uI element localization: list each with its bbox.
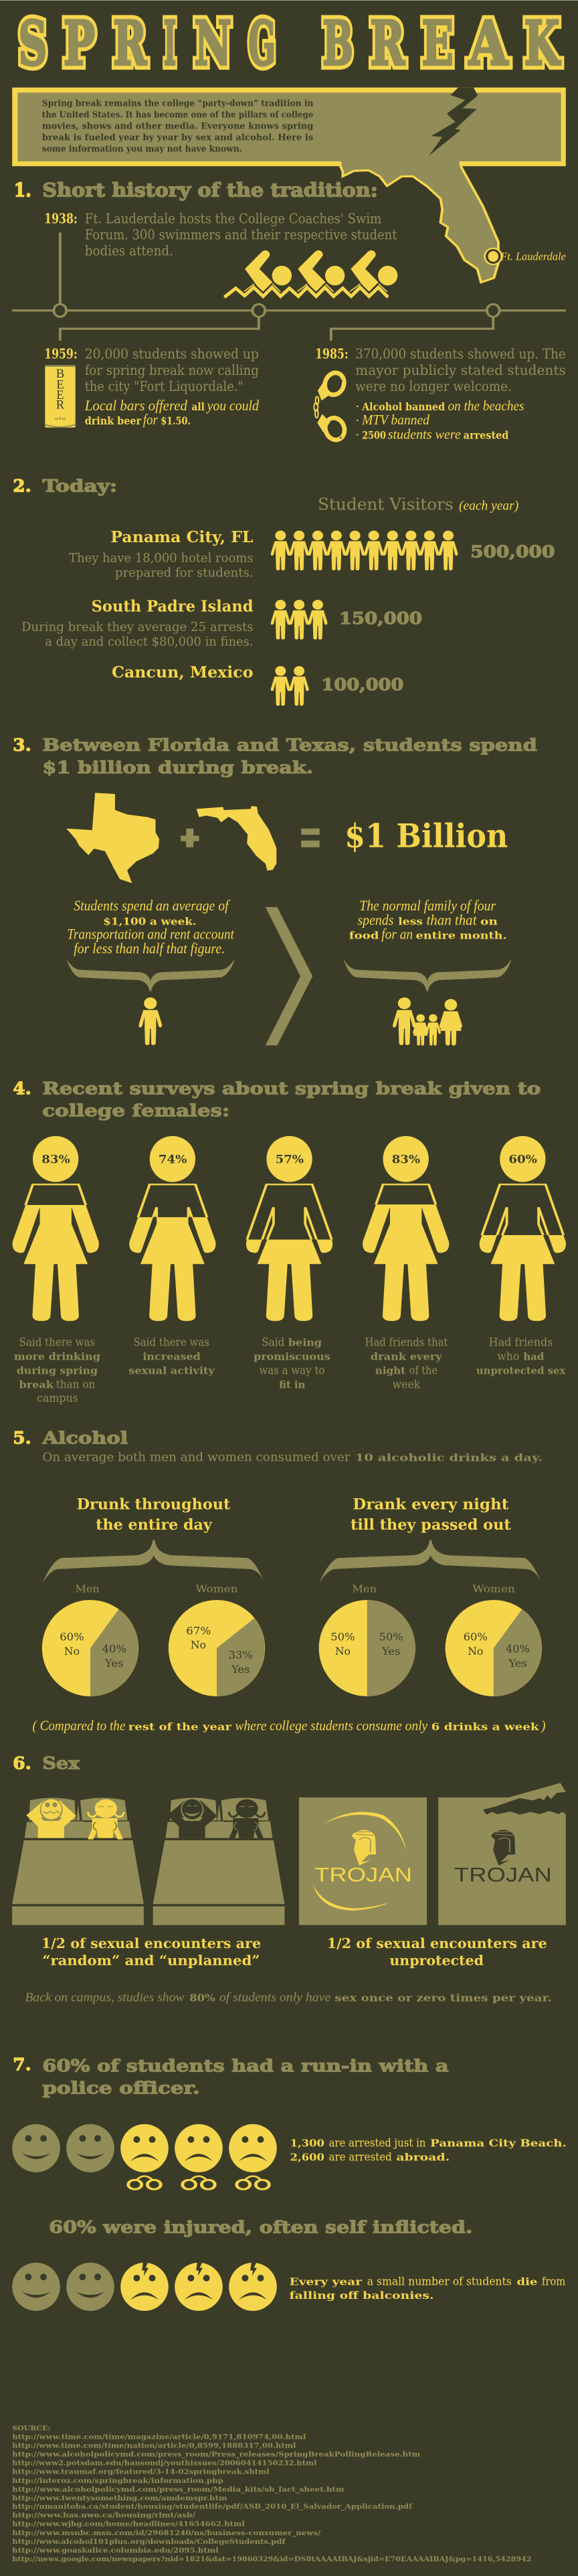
heading 6: [13, 1754, 80, 1773]
caption 5: [476, 1336, 566, 1376]
pictogram: three people: [271, 600, 327, 639]
group heading: drank every night: [351, 1496, 511, 1534]
note: comparison: ( Compared to the: [32, 1718, 125, 1733]
section 3: spending: [13, 736, 537, 1046]
text: student spending: Transportation and rent account: [67, 925, 235, 942]
pie: men drunk all day: [42, 1583, 138, 1696]
list: 1985 bans: arrested: [464, 429, 509, 442]
section: sources: http://www.msnbc.msn.com/id/29681240/ns/business-consumer_news/: [12, 2529, 320, 2537]
section: sources: http://www.alcohol101plus.org/downloads/CollegeStudents.pdf: [12, 2538, 286, 2546]
text: arrests: [290, 2137, 567, 2164]
caption 1: Said there was: [19, 1336, 95, 1349]
text: arrests: are arrested just in: [328, 2137, 426, 2150]
text: family spending: entire month.: [416, 929, 507, 941]
list: 1985 bans: ·: [355, 428, 359, 442]
caption 1: during spring: [17, 1364, 98, 1376]
row: Cancun: Cancun, Mexico: [112, 663, 254, 681]
caption 3: being: [288, 1336, 322, 1348]
caption 1: campus: [37, 1392, 78, 1404]
text: 1985: were no longer welcome.: [355, 379, 512, 394]
text: 1959: drink beer: [85, 415, 141, 427]
pie: women drunk all day: [169, 1583, 265, 1696]
section: sources: http://www2.potsdam.edu/hansondj/youthissues/20060414150232.html: [12, 2460, 316, 2468]
section: sources: http://www.traumaf.org/featured/3-14-02springbreak.shtml: [12, 2468, 270, 2476]
brace right: [319, 1540, 541, 1583]
title: [19, 8, 561, 80]
bed 2: pillows and dark figures: [165, 1797, 272, 1840]
bed 2 blanket: [153, 1840, 284, 1925]
section: sources: http://www.time.com/time/magazine/article/0,9171,810974,00.html: [12, 2433, 306, 2441]
figure: 83% more drinking: [13, 1136, 99, 1321]
text: arrests: are arrested: [328, 2151, 392, 2164]
faces: injuries: [12, 2263, 277, 2311]
note: back on campus: of students only have: [219, 1990, 330, 2004]
title: P: [64, 8, 95, 80]
title: N: [194, 8, 231, 80]
heading 2: [13, 477, 117, 496]
note: comparison: where college students consume only: [235, 1718, 427, 1733]
caption 4: week: [393, 1378, 420, 1391]
text: arrests: 1,300: [290, 2137, 324, 2149]
section: sources: http://www.twentysomething.com/amdemspr.htm: [12, 2494, 227, 2502]
figure: 83% more drinking: 83%: [41, 1153, 70, 1166]
icon: family of four: [393, 997, 462, 1046]
text: intro paragraph: break is fueled year by year by sex and alcohol. Here is: [42, 132, 313, 143]
list: 1985 bans: ·: [355, 400, 359, 413]
section: sources: SOURCE:: [12, 2425, 50, 2433]
text: arrests: 2,600: [290, 2151, 324, 2163]
heading 3: $1 billion during break.: [42, 758, 313, 778]
text: intro paragraph: the United States. It has become one of the pillars of college: [42, 109, 313, 120]
pictogram: two people: [271, 666, 309, 706]
text: student spending: [67, 896, 235, 957]
heading 5: 5.: [13, 1429, 31, 1448]
caption 4: Had friends that: [365, 1336, 448, 1349]
pie: women every night: 40%: [506, 1643, 530, 1656]
pie: women drunk all day: No: [191, 1639, 206, 1652]
pie: women every night: [446, 1583, 542, 1696]
icon: equals: [301, 829, 320, 848]
title: B: [322, 8, 353, 80]
marker: Ft. Lauderdale: [485, 248, 566, 264]
text: 1938: Ft. Lauderdale hosts the College Coaches' Swim: [85, 212, 381, 227]
brace right: [343, 959, 512, 991]
text: student spending: $1,100 a week.: [103, 915, 197, 927]
text: family spending: [349, 896, 507, 942]
pie: men drunk all day: No: [64, 1645, 80, 1658]
pie: men drunk all day: 60%: [60, 1631, 84, 1643]
heading 6: 6.: [13, 1754, 31, 1773]
pie: women every night: Women: [472, 1583, 515, 1595]
caption 4: drank every: [371, 1350, 442, 1362]
pie: women drunk all day: Women: [196, 1583, 237, 1595]
text: 1959: you could: [205, 398, 259, 414]
text: 1938: 1938:: [44, 211, 78, 227]
caption 3: Said: [262, 1336, 284, 1349]
note: comparison: rest of the year: [128, 1720, 232, 1733]
icon: beer can: 12 fl oz: [55, 417, 66, 421]
title: E: [421, 8, 454, 80]
figure: 74% increased sexual activity: 74%: [159, 1153, 187, 1166]
caption 1: break: [19, 1378, 54, 1390]
text: student spending: Students spend an average of: [74, 896, 230, 914]
heading 2: Today:: [42, 477, 117, 496]
text: deaths: Every year: [290, 2275, 363, 2287]
timeline: [12, 232, 566, 341]
section 6: sex: [12, 1754, 566, 2004]
row: Cancun: 100,000: [321, 675, 403, 694]
heading 1: Short history of the tradition:: [42, 180, 378, 202]
list: 1985 bans: ·: [355, 414, 359, 427]
text: family spending: than that: [427, 911, 477, 929]
note: comparison: 6 drinks a week: [431, 1720, 539, 1733]
text: family spending: food: [349, 929, 379, 941]
pie: women drunk all day: Yes: [231, 1664, 250, 1676]
caption 4: [365, 1336, 448, 1391]
icon: Texas: [66, 793, 159, 883]
group heading: drunk all day: the entire day: [96, 1516, 213, 1534]
title: R: [370, 8, 405, 80]
text: 1959: all: [192, 401, 205, 413]
icon: beer can: E: [56, 388, 64, 402]
row: South Padre Island: [21, 596, 422, 649]
row: Panama City: Panama City, FL: [110, 528, 254, 546]
text: family spending: less: [398, 915, 423, 927]
caption 1: than on: [56, 1378, 95, 1391]
list: 1985 bans: MTV banned: [361, 412, 430, 428]
row: Cancun: [112, 663, 403, 706]
icon: beer can: B: [56, 367, 64, 381]
caption: random: [41, 1935, 261, 1969]
pie: men every night: 50%: [379, 1631, 403, 1643]
text: alcohol intro: On average both men and women consumed over: [42, 1450, 351, 1464]
pie: men drunk all day: Men: [75, 1583, 100, 1595]
list: 1985 bans: 2500: [362, 429, 386, 442]
caption 3: was a way to: [259, 1364, 324, 1377]
caption 2: Said there was: [133, 1336, 209, 1349]
caption 2: [128, 1336, 215, 1376]
section: sources: http://www.goaskalice.columbia.edu/2095.html: [12, 2547, 219, 2555]
list: 1985 bans: students were: [388, 427, 461, 442]
caption: random: “random” and “unplanned”: [42, 1952, 260, 1969]
text: deaths: [290, 2275, 565, 2302]
brace left: [66, 959, 235, 991]
icon: beer can: E: [56, 378, 64, 392]
list: 1985 bans: [355, 398, 524, 442]
text: 1985: 1985:: [315, 346, 349, 362]
text: 1938: Forum. 300 swimmers and their respective student: [85, 228, 397, 243]
heading 4: 4.: [13, 1079, 31, 1099]
heading 1: 1.: [14, 180, 31, 202]
pie: men drunk all day: Yes: [104, 1658, 124, 1670]
heading 4: [13, 1079, 541, 1121]
text: deaths: die: [517, 2275, 537, 2287]
section: sources: http://interoz.com/springbreak/information.php: [12, 2477, 223, 2485]
pie: men every night: Men: [352, 1583, 377, 1595]
bed 1 blanket: [12, 1840, 144, 1925]
icon: handcuffs: [314, 370, 347, 442]
heading 4: college females:: [42, 1101, 229, 1121]
figure: 83% friends drank: [363, 1136, 449, 1321]
row: Panama City: prepared for students.: [115, 565, 254, 580]
text: arrests: abroad.: [396, 2151, 450, 2163]
row: South Padre Island: During break they average 25 arrests: [21, 620, 254, 634]
icon: plus: [181, 829, 199, 848]
text: 1959: Local bars offered: [84, 398, 187, 414]
caption: random: 1/2 of sexual encounters are: [41, 1935, 261, 1951]
text: 1938: [44, 211, 397, 259]
caption 5: had: [523, 1350, 545, 1362]
caption 1: [14, 1336, 100, 1404]
heading 5: Alcohol: [41, 1429, 128, 1448]
icon: beer can: [45, 365, 76, 428]
pie: men every night: 50%: [330, 1631, 355, 1643]
chart title: (each year): [459, 498, 518, 513]
text: intro paragraph: some information you may not have known.: [42, 143, 242, 154]
note: comparison: ): [541, 1718, 545, 1733]
text: 1938: bodies attend.: [85, 244, 173, 259]
pie: men every night: No: [335, 1645, 351, 1658]
brace left: [42, 1540, 265, 1583]
section: sources: http://umanitoba.ca/student/housing/studentlife/pdf/ASB_2010_El_Salvador_Application.pdf: [12, 2503, 413, 2511]
pie: men drunk all day: 40%: [102, 1643, 126, 1656]
heading 5: [13, 1429, 128, 1448]
text: 1959: 1959:: [44, 346, 78, 362]
section 7: police: [12, 2055, 567, 2311]
text: 1959: [44, 346, 259, 428]
chevron: greater than: [266, 907, 312, 1046]
heading 7: police officer.: [42, 2079, 200, 2098]
section: sources: http://www.wjhg.com/home/headlines/41654662.html: [12, 2520, 245, 2528]
pie: women every night: Yes: [508, 1658, 527, 1670]
icon: lightning bolt: [429, 88, 478, 156]
pictogram: ten people: [271, 531, 458, 570]
section: sources: http://www.alcoholpolicymd.com/press_room/Press_releases/SpringBreakPollingRelease.htm: [12, 2451, 421, 2459]
heading 2: 2.: [13, 477, 31, 496]
title: I: [164, 8, 176, 80]
row: South Padre Island: a day and collect $80,000 in fines.: [45, 635, 254, 649]
list: 1985 bans: Alcohol banned: [361, 401, 445, 413]
text: deaths: falling off balconies.: [290, 2289, 434, 2302]
icon: beer can: R: [56, 398, 65, 412]
row: Panama City: They have 18,000 hotel rooms: [69, 550, 254, 565]
title: A: [468, 8, 509, 80]
box: Trojan yellow: TROJAN: [314, 1864, 412, 1886]
equation: Texas plus Florida equals $1 billion: [66, 793, 508, 883]
text: intro paragraph: Spring break remains the college “party-down” tradition in: [42, 98, 313, 108]
section 2: today: [13, 477, 555, 706]
row: South Padre Island: South Padre Island: [92, 596, 254, 615]
faces: arrests: [12, 2124, 277, 2189]
text: 1959: the city "Fort Liquordale.": [85, 379, 244, 394]
text: 1959: 20,000 students showed up: [85, 347, 259, 362]
text: family spending: on: [480, 915, 498, 927]
note: back on campus: Back on campus, studies show: [25, 1990, 185, 2004]
pie: women every night: 60%: [464, 1631, 488, 1643]
section: sources: [12, 2425, 532, 2563]
text: intro paragraph: [42, 98, 314, 154]
box: Trojan opened: [438, 1783, 566, 1925]
heading 6: Sex: [42, 1754, 80, 1773]
text: family spending: spends: [357, 911, 393, 929]
caption 1: more drinking: [14, 1350, 100, 1362]
icon: Florida: [197, 806, 276, 871]
caption 2: increased: [142, 1350, 201, 1362]
list: 1985 bans: on the beaches: [448, 398, 524, 414]
text: intro paragraph: movies, shows and other media. Everyone knows spring: [42, 120, 314, 131]
figure: 57% promiscuous: [246, 1136, 332, 1321]
pie: women drunk all day: 33%: [229, 1649, 253, 1662]
figure: 57% promiscuous: 57%: [276, 1153, 304, 1166]
bed 1: pillows and yellow figures: [25, 1797, 132, 1840]
text: 1959: for spring break now calling: [85, 363, 259, 378]
panel: intro with Florida shape: [12, 88, 566, 283]
caption: unprotected: [327, 1935, 547, 1969]
note: back on campus: 80%: [189, 1992, 215, 2004]
section 5: alcohol: [13, 1429, 545, 1733]
text: student spending: for less than half that figure.: [74, 939, 225, 957]
heading 3: 3.: [13, 736, 31, 755]
figure: 60% unprotected: 60%: [508, 1153, 537, 1166]
caption 3: [254, 1336, 330, 1390]
row: South Padre Island: 150,000: [339, 609, 422, 628]
caption 3: promiscuous: [254, 1350, 330, 1362]
caption 2: sexual activity: [128, 1364, 215, 1376]
text: 1985: [315, 346, 566, 442]
section: intro and history: [12, 8, 566, 442]
heading 7: [13, 2055, 449, 2098]
text: 1959: for: [143, 412, 158, 428]
figure: 60% unprotected: [480, 1136, 566, 1321]
caption: unprotected: unprotected: [389, 1952, 484, 1969]
caption 3: fit in: [279, 1378, 305, 1390]
icon: swimmers: [224, 250, 397, 297]
figure: 83% friends drank: 83%: [392, 1153, 420, 1166]
figure: 74% increased sexual activity: [129, 1136, 215, 1321]
section: sources: http://www.has.uwo.ca/housing/rlmt/asb/: [12, 2512, 195, 2520]
caption 5: who: [497, 1350, 519, 1363]
group heading: drunk all day: Drunk throughout: [77, 1496, 230, 1513]
chart title: Student Visitors: [318, 495, 454, 514]
caption 4: of the: [409, 1364, 438, 1377]
row: Panama City: [69, 528, 555, 580]
pie: women drunk all day: 67%: [186, 1625, 211, 1637]
heading 3: [13, 736, 537, 778]
heading 7: 7.: [13, 2055, 31, 2075]
icon: single student: [138, 997, 162, 1045]
caption 4: night: [375, 1364, 405, 1376]
title: G: [248, 8, 276, 80]
title: S: [19, 8, 47, 80]
box: Trojan yellow: [299, 1797, 427, 1925]
pie: men every night: [319, 1583, 415, 1696]
pie: men every night: Yes: [381, 1645, 400, 1658]
pie: women every night: No: [468, 1645, 483, 1658]
section: sources: http://www.time.com/time/nation/article/0,8599,1888317,00.html: [12, 2442, 296, 2450]
title: R: [113, 8, 147, 80]
section 4: surveys: [13, 1079, 566, 1404]
text: 1959: $1.50.: [161, 415, 191, 427]
section: sources: http://www.alcoholpolicymd.com/press_room/Media_kits/sb_fact_sheet.htm: [12, 2486, 345, 2494]
text: family spending: for an: [381, 925, 413, 942]
group heading: drunk all day: [77, 1496, 230, 1534]
